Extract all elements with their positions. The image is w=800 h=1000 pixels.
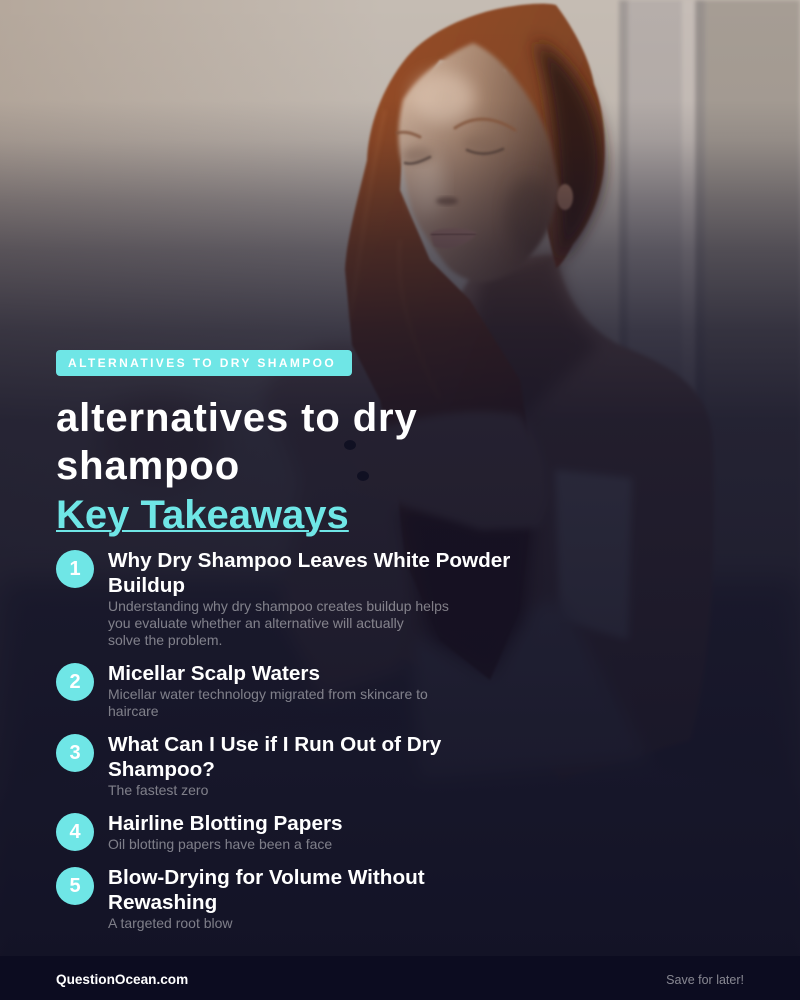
- nails: [344, 440, 369, 481]
- hand: [345, 412, 547, 530]
- category pill: [56, 350, 352, 376]
- cheek shadow: [506, 177, 554, 253]
- takeaway 5: Rewashing: [108, 891, 217, 914]
- takeaway 1: Why Dry Shampoo Leaves White Powder: [108, 549, 510, 572]
- takeaway 4: Hairline Blotting Papers: [108, 812, 343, 835]
- wall panels: [619, 0, 800, 1000]
- footer bar: [0, 956, 800, 1000]
- takeaway 3: [56, 733, 442, 798]
- takeaway 1: you evaluate whether an alternative will actually: [108, 615, 404, 631]
- category pill: ALTERNATIVES TO DRY SHAMPOO: [68, 356, 336, 370]
- takeaway 5: A targeted root blow: [108, 915, 233, 931]
- takeaway 3: What Can I Use if I Run Out of Dry: [108, 733, 441, 756]
- takeaway 3: 3: [69, 742, 81, 764]
- takeaway 5: [56, 866, 425, 931]
- takeaway 2: haircare: [108, 703, 159, 719]
- eye sockets: [403, 135, 507, 163]
- eyes: [405, 149, 503, 164]
- takeaway 4: [56, 812, 343, 852]
- towel: [555, 470, 632, 640]
- hair strands: [350, 110, 440, 400]
- takeaway 2: Micellar water technology migrated from skincare to: [108, 686, 428, 702]
- takeaway 1: 1: [69, 558, 81, 580]
- body: shoulder and arm: [380, 255, 714, 780]
- main title: [56, 396, 418, 537]
- takeaway 4: 4: [69, 821, 81, 843]
- takeaway 1: solve the problem.: [108, 632, 222, 648]
- dark hair back: [535, 40, 603, 262]
- takeaway 2: Micellar Scalp Waters: [108, 662, 320, 685]
- lower hair dark: [400, 510, 535, 675]
- left arm: [262, 344, 420, 700]
- face: [398, 43, 560, 282]
- takeaway 4: Oil blotting papers have been a face: [108, 836, 332, 852]
- brush at left: [100, 395, 220, 485]
- heading: Key Takeaways: Key Takeaways: [56, 493, 349, 537]
- takeaway 5: Blow-Drying for Volume Without: [108, 866, 425, 889]
- save for later: Save for later!: [666, 973, 744, 987]
- bed: [0, 580, 800, 1000]
- takeaway 5: 5: [69, 875, 81, 897]
- takeaway 3: Shampoo?: [108, 758, 215, 781]
- blanket: [0, 735, 800, 1000]
- main title: alternatives to dry: [56, 396, 418, 440]
- hair: [345, 4, 605, 680]
- nose highlight: [412, 155, 444, 215]
- takeaway 2: 2: [69, 671, 81, 693]
- eyebrows: [397, 119, 515, 137]
- takeaway 3: The fastest zero: [108, 782, 208, 798]
- lips: [430, 228, 477, 248]
- nose: [436, 197, 458, 205]
- takeaway 2: [56, 662, 428, 719]
- neck shadow: [470, 250, 600, 420]
- takeaway 1: Understanding why dry shampoo creates buildup helps: [108, 598, 449, 614]
- main title: shampoo: [56, 444, 240, 488]
- ear: [557, 184, 573, 210]
- takeaway 1: [56, 549, 510, 648]
- forehead highlight: [411, 72, 475, 124]
- brand name: QuestionOcean.com: [56, 972, 188, 987]
- takeaway 1: Buildup: [108, 574, 185, 597]
